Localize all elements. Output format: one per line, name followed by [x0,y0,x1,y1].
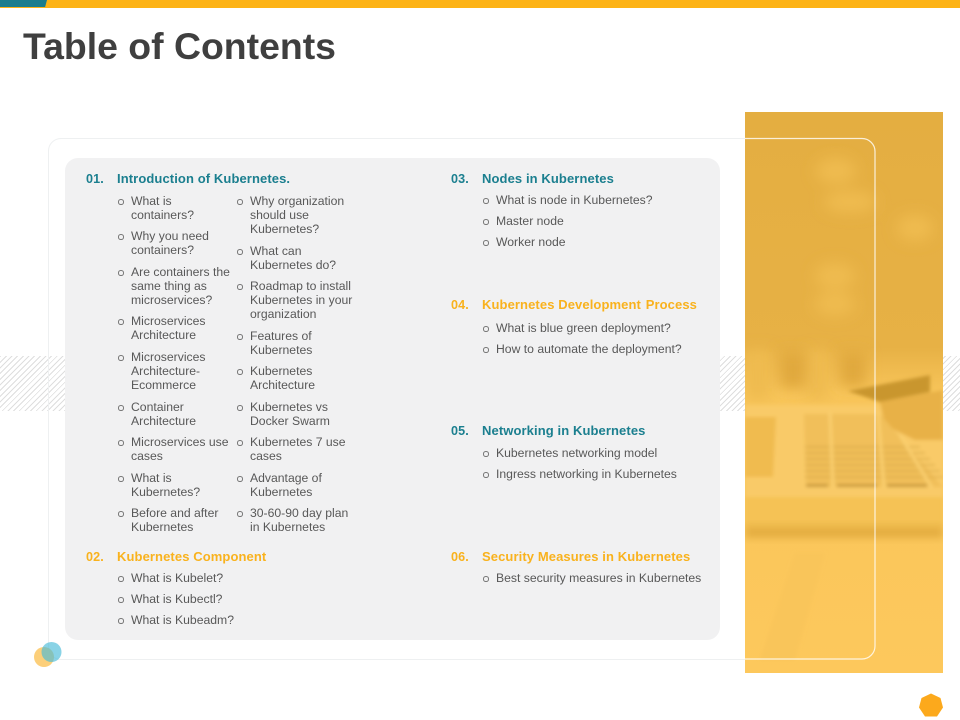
section 03 list [483,193,653,249]
section 01 list, column 2: in Kubernetes [250,520,325,534]
section 04 list: How to automate the deployment? [496,342,682,356]
section 01 list, column 2: Architecture [250,378,315,392]
section 01 list, column 1: What is [131,471,172,485]
section 01 list, column 2: Docker Swarm [250,414,330,428]
section 01 list, column 2: Kubernetes [250,485,312,499]
section 05 list [483,446,677,481]
section 01 list, column 2: cases [250,449,282,463]
top bar teal accent [0,0,47,7]
content panel [65,158,720,640]
section 01 list, column 2 [237,194,352,534]
section 01 list, column 2: organization [250,307,316,321]
section 02 list: What is Kubectl? [131,592,222,606]
section 02 heading: Kubernetes Component [117,549,266,564]
section 01 list, column 2: Why organization [250,194,344,208]
section 04 heading: Kubernetes Development Process [482,297,697,312]
section 04 list [483,321,682,356]
section 03 heading: Nodes in Kubernetes [482,171,614,186]
section 01 list, column 1: Architecture- [131,364,200,378]
section 05 list: Ingress networking in Kubernetes [496,467,677,481]
section 06 list: Best security measures in Kubernetes [496,571,701,585]
section 01 list, column 2: Kubernetes do? [250,258,336,272]
photo panel: laptop with yellow tint [745,112,943,673]
section 01 list, column 2: Features of [250,329,312,343]
section 01 list, column 1: Before and after [131,506,218,520]
decorative overlapping circles [34,642,62,667]
section 03 list: Master node [496,214,564,228]
section 01 list, column 1: Are containers the [131,265,230,279]
icon: amber heptagon [919,694,943,716]
section 01 list, column 2: Kubernetes? [250,222,319,236]
section 02 list [118,571,234,627]
top bar [0,0,960,8]
section 05 heading: Networking in Kubernetes [482,423,645,438]
section 01 list, column 2: should use [250,208,309,222]
section 01 list, column 1: Container [131,400,184,414]
section 05 heading: 05. [451,424,469,438]
section 01 list, column 1: Microservices [131,314,206,328]
section 06 heading: 06. [451,550,469,564]
section 01 list, column 2: Kubernetes [250,364,312,378]
section 01 list, column 1: Architecture [131,328,196,342]
title: Table of Contents [23,25,336,67]
section 06 heading: Security Measures in Kubernetes [482,549,690,564]
section 01 list, column 1: Kubernetes? [131,485,200,499]
section 02 heading: 02. [86,550,104,564]
section 04 heading: 04. [451,298,469,312]
section 01 list, column 1: same thing as [131,279,207,293]
section 01 list, column 1: Microservices use [131,435,229,449]
section 02 list: What is Kubeadm? [131,613,234,627]
section 01 list, column 2: Advantage of [250,471,322,485]
section 03 heading: 03. [451,172,469,186]
section 01 list, column 1: containers? [131,208,194,222]
section 01 heading: 01. [86,172,104,186]
section 01 list, column 1: cases [131,449,163,463]
section 01 list, column 2: Kubernetes in your [250,293,352,307]
section 01 list, column 1 [118,194,230,534]
section 03 list: Worker node [496,235,566,249]
section 01 list, column 2: What can [250,244,301,258]
section 01 list, column 1: Why you need [131,229,209,243]
section 01 list, column 1: microservices? [131,293,212,307]
section 01 heading: Introduction of Kubernetes. [117,171,290,186]
section 04 list: What is blue green deployment? [496,321,671,335]
section 01 list, column 1: What is [131,194,172,208]
section 01 list, column 2: Roadmap to install [250,279,351,293]
section 01 list, column 2: Kubernetes 7 use [250,435,346,449]
section 01 list, column 1: Kubernetes [131,520,193,534]
section 01 list, column 1: Ecommerce [131,378,196,392]
section 01 list, column 2: Kubernetes [250,343,312,357]
hatched band [0,356,960,411]
frame outline [48,138,877,660]
section 01 list, column 1: Architecture [131,414,196,428]
section 01 list, column 1: containers? [131,243,194,257]
section 01 list, column 2: Kubernetes vs [250,400,328,414]
section 02 list: What is Kubelet? [131,571,223,585]
section 05 list: Kubernetes networking model [496,446,657,460]
section 01 list, column 1: Microservices [131,350,206,364]
section 03 list: What is node in Kubernetes? [496,193,653,207]
section 01 list, column 2: 30-60-90 day plan [250,506,348,520]
